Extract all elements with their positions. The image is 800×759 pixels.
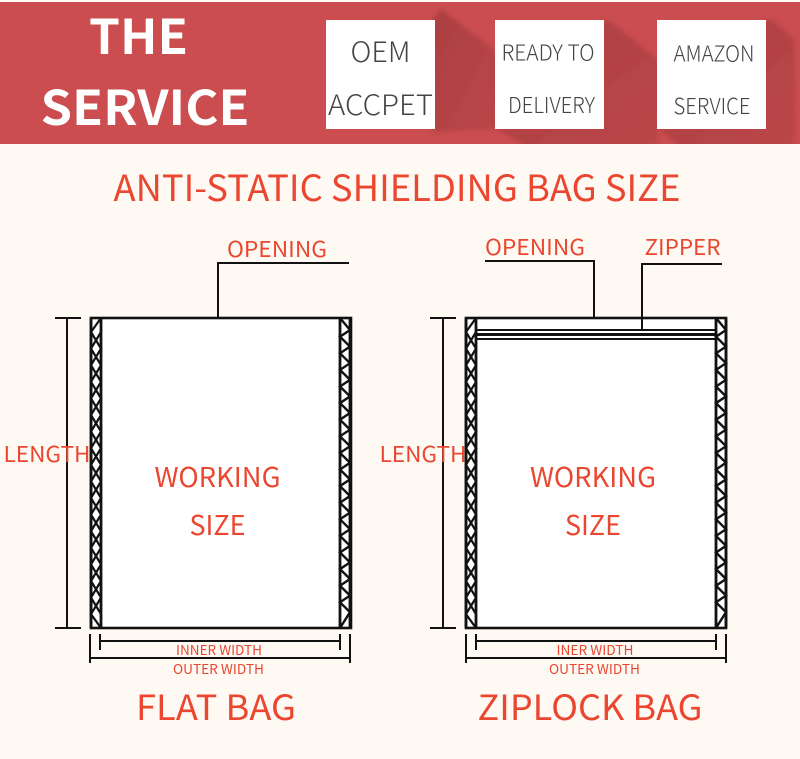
banner title: SERVICE [40, 69, 250, 139]
left gusset [466, 318, 476, 628]
working size label: SIZE [565, 504, 621, 543]
outer width label: OUTER WIDTH [549, 658, 640, 678]
working size label: WORKING [530, 456, 656, 495]
right gusset [340, 318, 350, 628]
service card: OEM accept [326, 20, 435, 129]
zipper lines [476, 330, 716, 339]
working size label [154, 456, 280, 543]
length label: LENGTH [4, 437, 91, 469]
right gusset [716, 318, 726, 628]
zipper leader [642, 264, 722, 330]
working size label: SIZE [190, 504, 246, 543]
opening label: OPENING [485, 230, 585, 262]
outer width dimension [90, 634, 350, 663]
ziplock bag caption: ZIPLOCK BAG [478, 680, 702, 731]
service card: ready to delivery [495, 20, 604, 129]
service card: amazon service: SERVICE [674, 89, 750, 121]
zipper label: ZIPPER [644, 230, 721, 262]
diagram: ziplock bag [380, 230, 726, 731]
service card: amazon service: AMAZON [674, 36, 754, 68]
inner width label: INER WIDTH [556, 639, 634, 659]
opening leader [485, 261, 594, 318]
service card: amazon service [657, 20, 766, 129]
service card: ready to delivery: READY TO [502, 36, 594, 68]
inner width label: INNER WIDTH [176, 639, 262, 659]
working size label: WORKING [154, 456, 280, 495]
length label: LENGTH [380, 437, 466, 469]
inner width dimension [100, 634, 340, 650]
service card: ready to delivery: DELIVERY [508, 88, 595, 120]
banner title: THE [89, 0, 188, 68]
opening leader [218, 263, 349, 318]
service card: OEM accept: OEM [350, 31, 410, 71]
service card: OEM accept: ACCPET [328, 84, 433, 124]
bag body [91, 318, 351, 628]
outer width label: OUTER WIDTH [173, 658, 264, 678]
length dimension [55, 318, 81, 628]
banner title [40, 0, 250, 139]
flat bag caption: FLAT BAG [136, 680, 296, 731]
heading: ANTI-STATIC SHIELDING BAG SIZE [114, 160, 680, 212]
diagram: flat bag [4, 232, 351, 731]
length dimension [430, 318, 456, 628]
left gusset [91, 318, 101, 628]
opening label: OPENING [227, 232, 327, 264]
outer width dimension [466, 634, 726, 663]
inner width dimension [476, 634, 716, 650]
header banner [0, 0, 800, 150]
bag body [466, 318, 726, 628]
working size label [530, 456, 656, 543]
